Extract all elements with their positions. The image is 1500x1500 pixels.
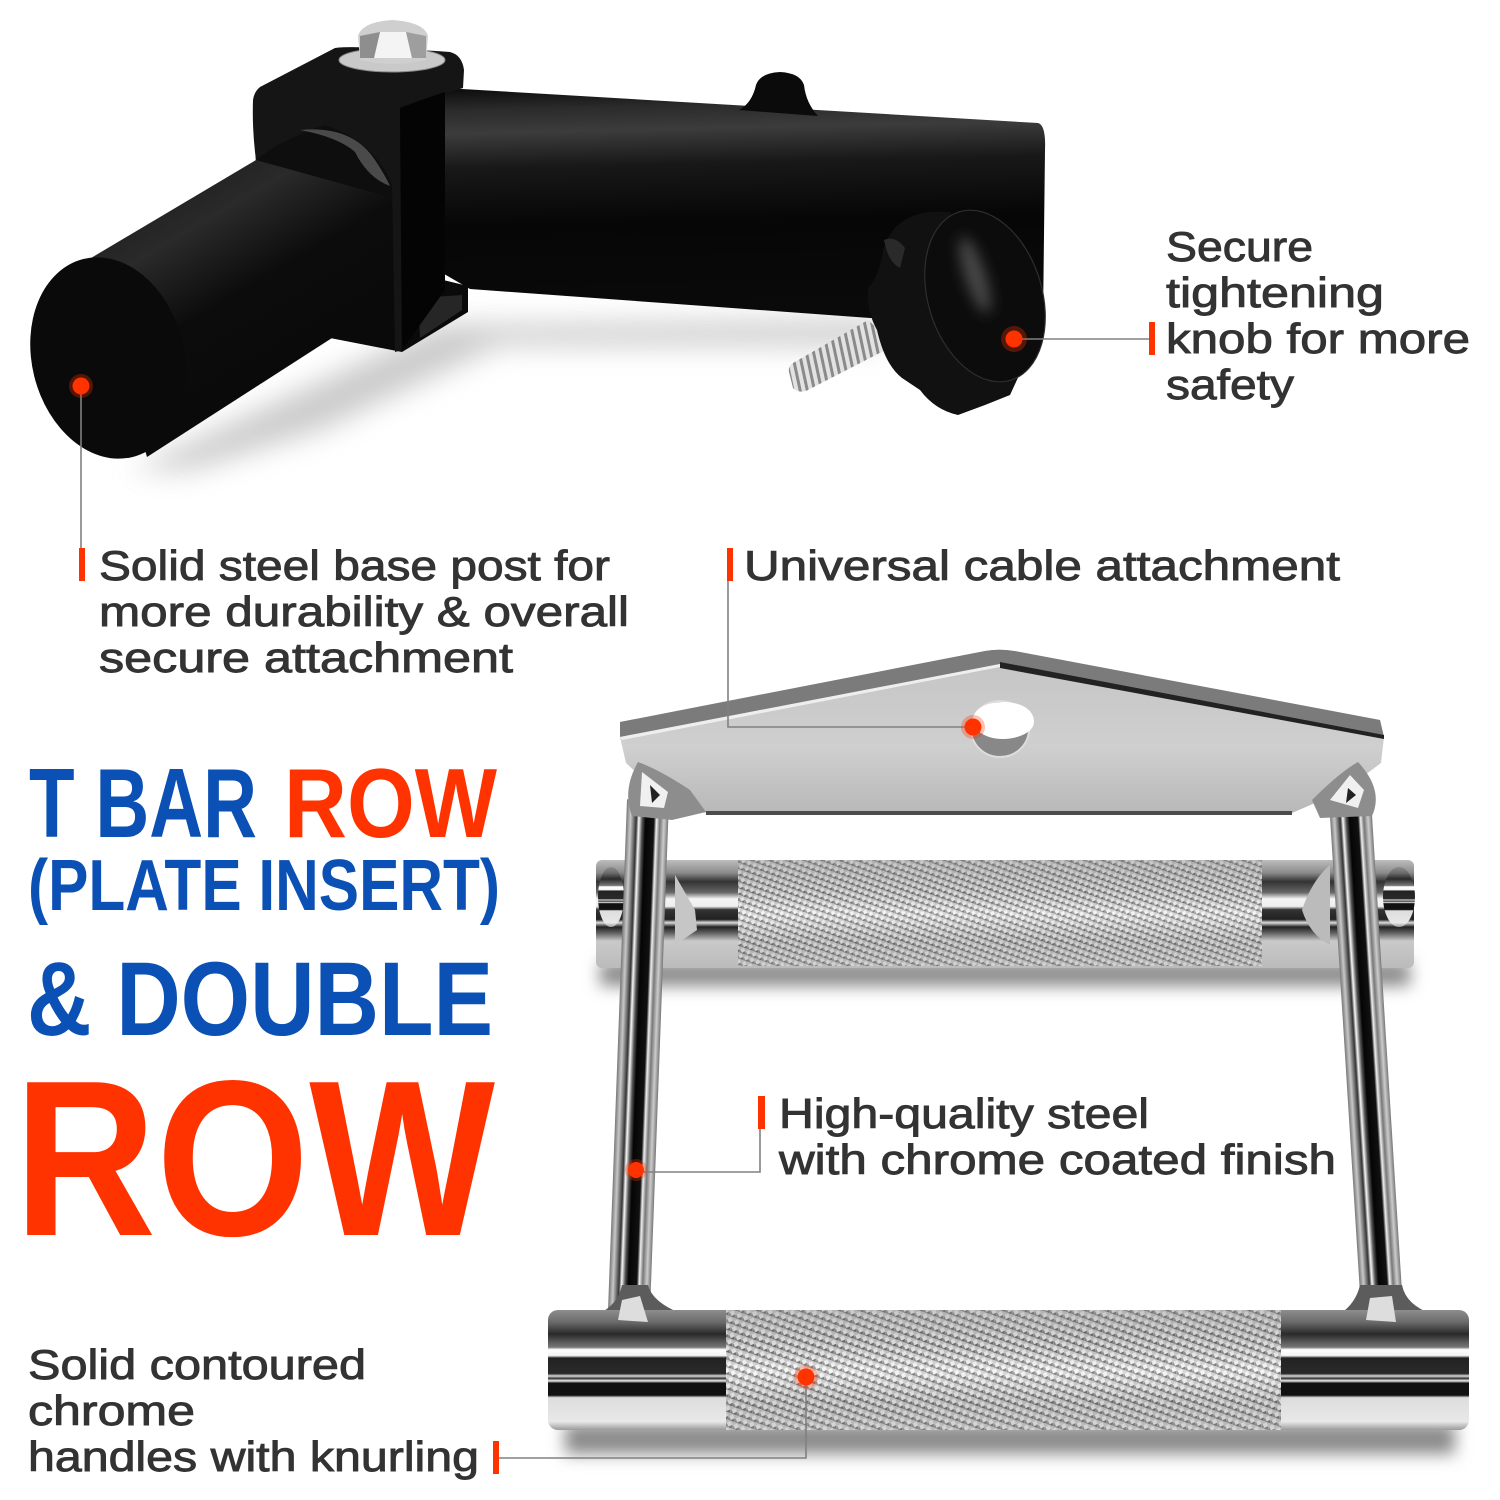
lower bracket	[330, 270, 468, 352]
callout: tightening knob: safety	[1166, 361, 1294, 408]
weld marks	[628, 762, 706, 820]
title: ROW	[284, 748, 497, 858]
callout: high-quality steel: with chrome coated finish	[778, 1136, 1336, 1183]
front handle	[548, 1285, 1469, 1430]
title: T BAR	[29, 748, 257, 858]
shadow under T bar	[130, 320, 880, 470]
callout: contoured chrome handles: handles with knurling	[28, 1433, 479, 1480]
title	[14, 748, 500, 1283]
knob thread	[789, 320, 895, 392]
callout: high-quality steel	[625, 1090, 1336, 1183]
callout: tightening knob	[1001, 223, 1470, 408]
callout: solid steel base post: secure attachment	[99, 634, 513, 681]
tightening knob dome	[905, 195, 1065, 397]
side rods	[608, 799, 1403, 1312]
upper bracket	[253, 47, 464, 352]
top plate	[620, 650, 1384, 820]
title: ROW	[14, 1035, 495, 1283]
end cap	[10, 241, 206, 475]
callout: contoured chrome handles	[28, 1341, 818, 1480]
hex bolt	[358, 20, 428, 64]
T bar row attachment photo	[10, 20, 1065, 475]
callout: universal cable attachment	[727, 542, 1340, 739]
bolt washer	[339, 48, 445, 72]
handle shadows	[565, 962, 1455, 1454]
callout: tightening knob: Secure	[1166, 223, 1313, 270]
double row handle photo	[548, 650, 1469, 1454]
tightening knob lobes	[868, 212, 1040, 415]
rear handle	[596, 860, 1415, 968]
callout: tightening knob: knob for more	[1166, 315, 1470, 362]
callout: contoured chrome handles: chrome	[28, 1387, 195, 1434]
main tube	[420, 88, 1045, 320]
callout: universal cable attachment: Universal cable attachment	[744, 542, 1340, 589]
plate hole	[971, 701, 1029, 757]
callout: contoured chrome handles: Solid contoured	[28, 1341, 366, 1388]
title: & DOUBLE	[27, 941, 493, 1058]
callout: high-quality steel: High-quality steel	[779, 1090, 1149, 1137]
tube set-screw boss	[739, 72, 818, 116]
callout: solid steel base post: more durability & overall	[99, 588, 629, 635]
callout: tightening knob: tightening	[1166, 269, 1384, 316]
callout: solid steel base post	[69, 374, 629, 681]
bracket rear filler	[253, 100, 405, 300]
angled post	[91, 160, 400, 457]
callout: solid steel base post: Solid steel base post for	[99, 542, 610, 589]
title: (PLATE INSERT)	[28, 846, 500, 926]
